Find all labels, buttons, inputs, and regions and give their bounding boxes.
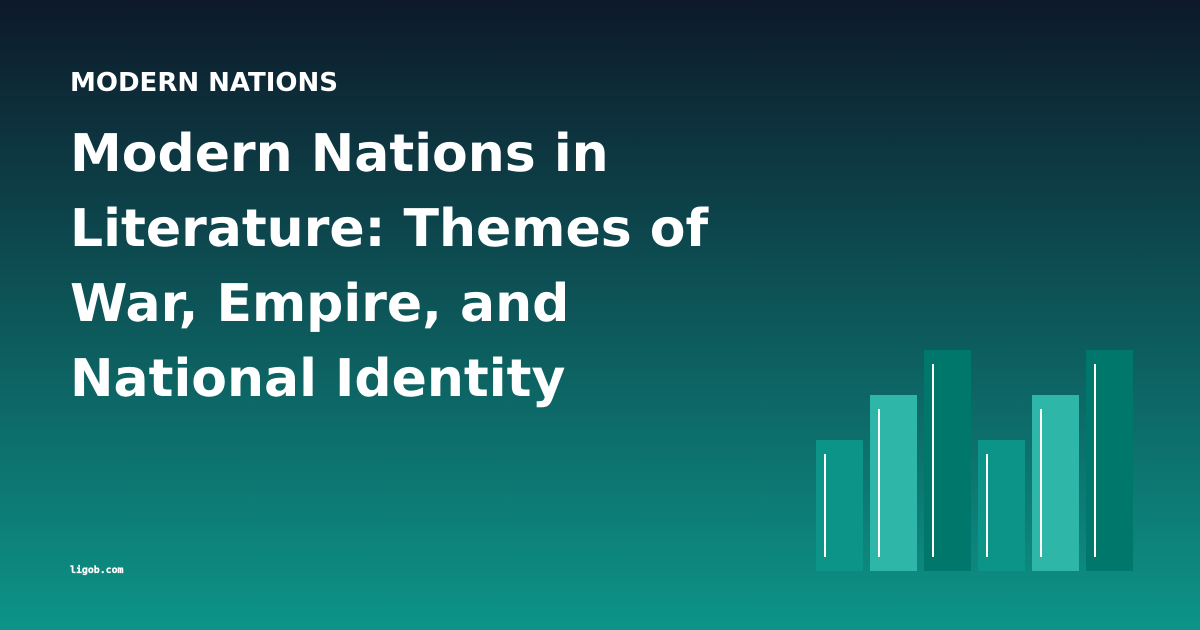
bar 1 xyxy=(816,440,863,571)
bar chart decoration xyxy=(816,350,1133,571)
title xyxy=(70,124,709,409)
title: Literature: Themes of xyxy=(70,199,708,259)
title: Modern Nations in xyxy=(70,124,609,184)
eyebrow label: MODERN NATIONS xyxy=(70,68,338,98)
title: War, Empire, and xyxy=(70,274,569,334)
bar 3 xyxy=(924,350,971,571)
bar 2 xyxy=(870,395,917,571)
footer domain: ligob.com xyxy=(70,565,124,576)
bar 6 xyxy=(1086,350,1133,571)
bar 4 xyxy=(978,440,1025,571)
title: National Identity xyxy=(70,349,565,409)
bar 5 xyxy=(1032,395,1079,571)
